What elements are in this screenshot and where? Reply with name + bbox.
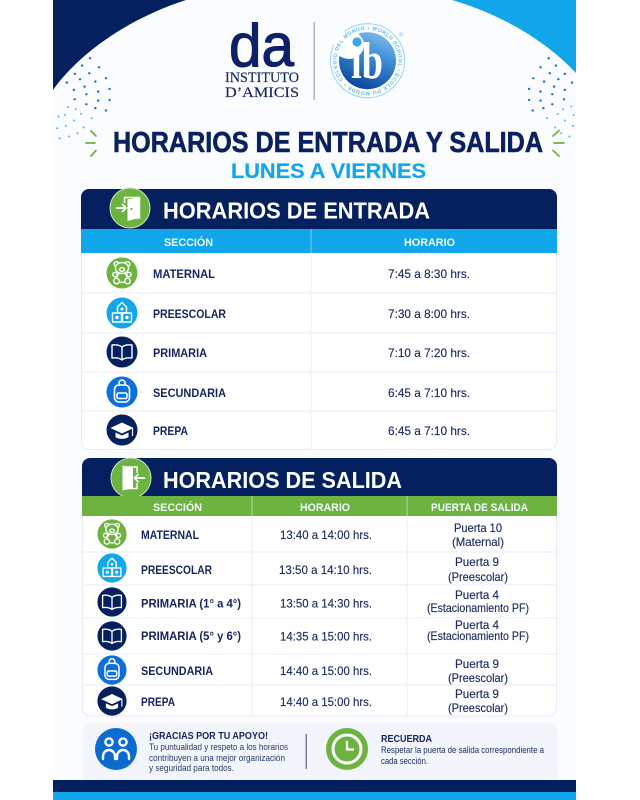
row: primaria 1 a 4 xyxy=(97,587,529,617)
row: secundaria: Puerta 9 xyxy=(455,657,499,671)
row: primaria 5 y 6: Puerta 4 xyxy=(455,618,499,632)
thank-you text: Tu puntualidad y respeto a los horarios xyxy=(149,742,288,752)
column header: horario: HORARIO xyxy=(300,502,350,514)
row: prepa xyxy=(106,414,470,446)
panel: horarios de entrada xyxy=(81,188,557,450)
icon: graduation cap xyxy=(97,686,127,716)
icon: exit door xyxy=(111,458,151,498)
reminder text: cada sección. xyxy=(381,756,428,766)
row: preescolar: 7:30 a 8:00 hrs. xyxy=(388,307,470,321)
footer divider xyxy=(306,734,307,769)
header heading: HORARIOS DE SALIDA xyxy=(163,467,402,493)
logo: Instituto D'Amicis: da xyxy=(229,12,295,79)
row: maternal: (Maternal) xyxy=(452,535,504,549)
row: maternal: Puerta 10 xyxy=(454,521,502,535)
logo divider xyxy=(314,22,315,100)
row: primaria xyxy=(106,336,470,368)
header heading: HORARIOS DE ENTRADA xyxy=(163,198,430,224)
bottom band: sky blue xyxy=(53,792,576,800)
row: primaria 5 y 6: (Estacionamiento PF) xyxy=(427,629,529,643)
logo: Instituto D'Amicis xyxy=(225,12,299,101)
icon: book xyxy=(97,621,127,651)
column header row xyxy=(81,229,557,253)
reminder text: RECUERDA xyxy=(381,733,432,745)
row: maternal: 7:45 a 8:30 hrs. xyxy=(388,267,470,281)
row: prepa: 14:40 a 15:00 hrs. xyxy=(280,695,372,709)
panel: footer notes xyxy=(83,723,558,780)
thank-you text: y seguridad para todos. xyxy=(149,763,234,773)
row: preescolar: Puerta 9 xyxy=(455,555,499,569)
row: prepa: (Preescolar) xyxy=(448,701,508,715)
row: secundaria: (Preescolar) xyxy=(448,671,508,685)
row: primaria 1 a 4: Puerta 4 xyxy=(455,588,499,602)
logo: Instituto D'Amicis: INSTITUTO xyxy=(225,70,299,86)
top corner shape: sky blue xyxy=(452,0,576,73)
accent marks left xyxy=(86,131,96,156)
row: preescolar: (Preescolar) xyxy=(448,570,508,584)
row: primaria 5 y 6: PRIMARIA (5° y 6°) xyxy=(141,629,241,643)
title: HORARIOS DE ENTRADA Y SALIDA xyxy=(113,127,543,159)
icon: book xyxy=(97,587,127,617)
bottom band: navy xyxy=(53,780,576,792)
table body xyxy=(82,200,556,450)
row: secundaria: 6:45 a 7:10 hrs. xyxy=(388,386,470,400)
icon: entry door xyxy=(110,188,150,228)
logo: IB World School: ® xyxy=(399,32,404,39)
row: maternal: MATERNAL xyxy=(141,528,199,542)
row: primaria 1 a 4: (Estacionamiento PF) xyxy=(427,601,529,615)
logo: IB World School: COLEGIO DEL MUNDO • WORLD SCHOOL • ÉCOLE DU MONDE • xyxy=(332,26,402,96)
footer background xyxy=(83,723,558,780)
icon: backpack xyxy=(106,376,138,408)
row: prepa xyxy=(97,686,508,716)
icon: book xyxy=(106,336,138,368)
icon: people xyxy=(95,728,137,770)
row: secundaria: 14:40 a 15:00 hrs. xyxy=(280,664,372,678)
row: maternal: 13:40 a 14:00 hrs. xyxy=(280,528,372,542)
row: preescolar: PREESCOLAR xyxy=(141,563,212,577)
header bar xyxy=(81,189,557,229)
table body xyxy=(82,470,556,716)
row: secundaria: SECUNDARIA xyxy=(153,386,226,400)
icon: blocks xyxy=(106,298,138,328)
icon: graduation cap xyxy=(106,414,138,446)
row: preescolar: 13:50 a 14:10 hrs. xyxy=(279,563,372,577)
column header row xyxy=(82,496,557,516)
decorative dots left xyxy=(56,57,111,139)
column header: horario: HORARIO xyxy=(404,237,455,249)
row: secundaria: SECUNDARIA xyxy=(141,664,213,678)
icon: blocks xyxy=(97,553,127,583)
thank-you text: ¡GRACIAS POR TU APOYO! xyxy=(149,730,268,742)
row: maternal xyxy=(97,519,504,549)
reminder text: Respetar la puerta de salida correspondiente a xyxy=(381,745,544,755)
row: prepa: PREPA xyxy=(153,424,188,438)
row: prepa: PREPA xyxy=(141,695,175,709)
row: prepa: 6:45 a 7:10 hrs. xyxy=(388,424,470,438)
icon: teddy bear xyxy=(97,519,127,549)
accent marks right xyxy=(553,130,564,156)
row: preescolar xyxy=(97,553,508,584)
icon: backpack xyxy=(97,655,127,685)
logo: IB World School: ib xyxy=(351,33,383,90)
row: maternal xyxy=(106,258,470,288)
row: preescolar xyxy=(106,298,470,328)
column header: puerta de salida: PUERTA DE SALIDA xyxy=(431,502,528,514)
reminder text xyxy=(381,733,544,766)
row: preescolar: PREESCOLAR xyxy=(153,307,226,321)
column header: seccion: SECCIÓN xyxy=(153,501,202,514)
column header: seccion: SECCIÓN xyxy=(164,236,213,249)
top corner shape: navy xyxy=(53,0,186,90)
row: prepa: Puerta 9 xyxy=(455,687,499,701)
subtitle: LUNES A VIERNES xyxy=(231,159,426,183)
row: maternal: MATERNAL xyxy=(153,267,215,281)
row: primaria 1 a 4: 13:50 a 14:30 hrs. xyxy=(280,596,372,610)
row: primaria: 7:10 a 7:20 hrs. xyxy=(388,346,470,360)
decorative dots right xyxy=(528,57,575,138)
row: primaria 1 a 4: PRIMARIA (1° a 4°) xyxy=(141,596,241,610)
row: secundaria xyxy=(106,376,470,408)
thank-you text xyxy=(149,730,288,773)
row: primaria 5 y 6 xyxy=(97,618,529,651)
row: secundaria xyxy=(97,655,508,685)
row: primaria 5 y 6: 14:35 a 15:00 hrs. xyxy=(280,630,372,644)
header bar xyxy=(82,458,557,496)
panel: horarios de salida xyxy=(82,458,557,716)
icon: clock xyxy=(326,728,368,770)
thank-you text: contribuyen a una mejor organización xyxy=(149,753,285,763)
logo: Instituto D'Amicis: D’AMICIS xyxy=(225,85,299,101)
row: primaria: PRIMARIA xyxy=(153,346,207,360)
icon: teddy bear xyxy=(106,258,138,288)
